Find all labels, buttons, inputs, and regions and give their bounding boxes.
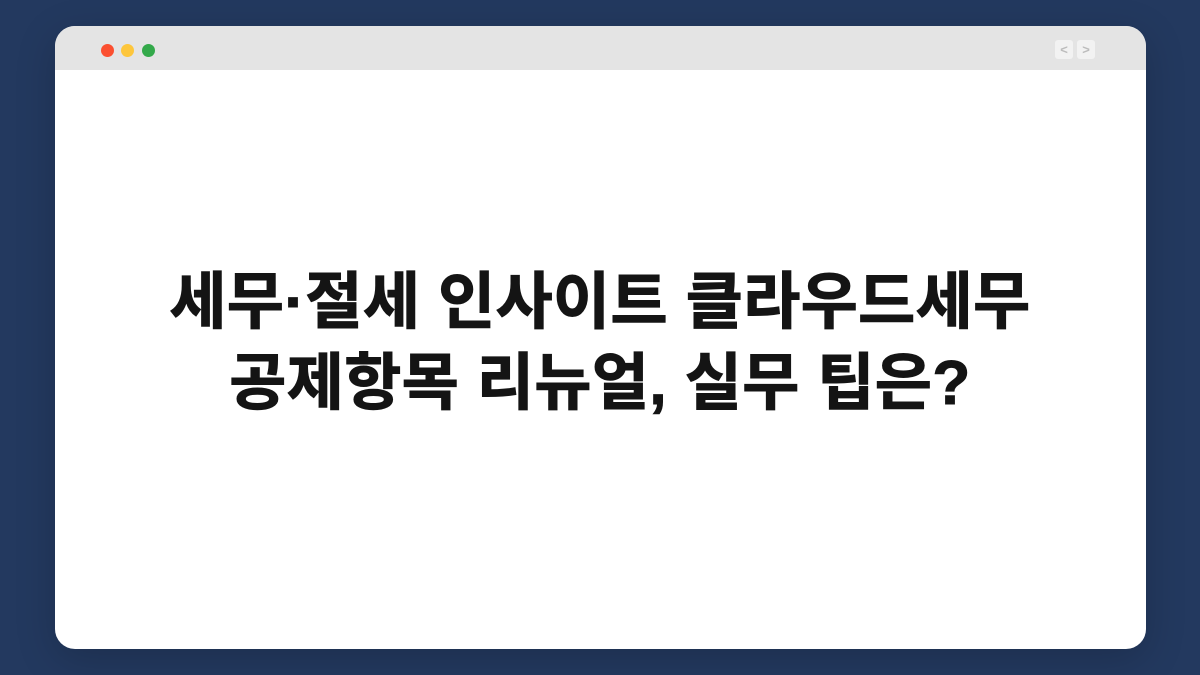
title xyxy=(169,268,1031,418)
icon: green window dot xyxy=(142,44,155,57)
icon: forward button xyxy=(1077,40,1095,59)
icon: yellow window dot xyxy=(121,44,134,57)
icon: forward button: > xyxy=(1082,42,1090,57)
icon: back button: < xyxy=(1060,42,1068,57)
title: 공제항목 리뉴얼, 실무 팁은? xyxy=(229,349,971,418)
icon: red window dot xyxy=(101,44,114,57)
icon: back button xyxy=(1055,40,1073,59)
title bar xyxy=(55,26,1146,70)
title: 세무·절세 인사이트 클라우드세무 xyxy=(169,268,1031,337)
